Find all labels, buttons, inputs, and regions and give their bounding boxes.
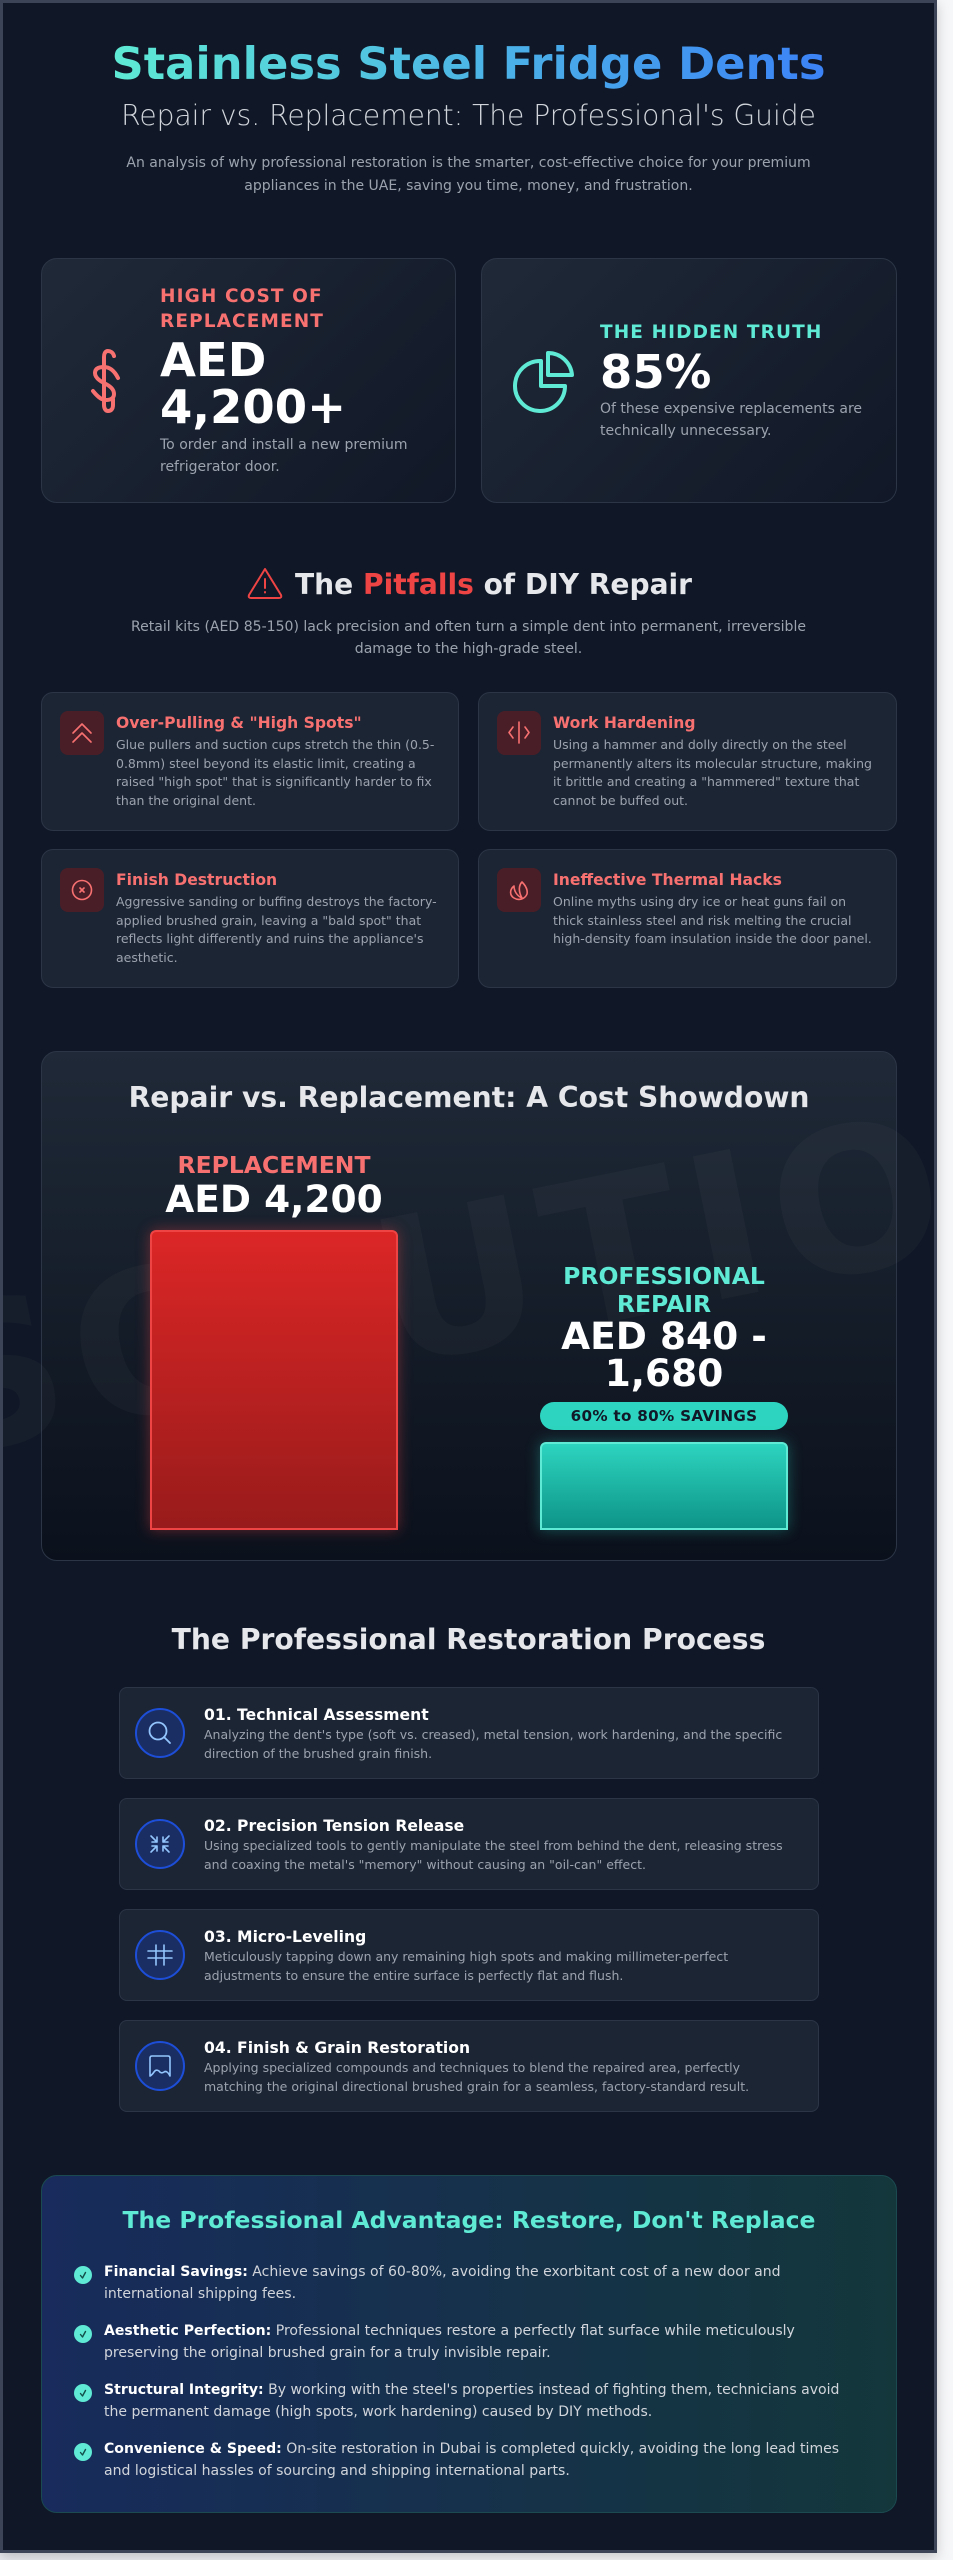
stat description — [600, 401, 862, 439]
step 1 — [119, 1687, 819, 1779]
stat value — [160, 333, 346, 434]
intro text: appliances in the UAE, saving you time, money, and frustration. — [244, 178, 693, 194]
savings pill — [540, 1402, 788, 1430]
repair label — [563, 1262, 765, 1318]
description: Glue pullers and suction cups stretch the thin (0.5- — [116, 737, 434, 752]
heading: Repair vs. Replacement: A Cost Showdown — [129, 1081, 809, 1114]
icon: pie chart — [513, 351, 574, 413]
bar: replacement — [150, 1230, 398, 1530]
text — [104, 2441, 839, 2479]
panel: high cost of replacement — [41, 258, 456, 503]
description: Using a hammer and dolly directly on the steel — [553, 737, 847, 752]
replacement label: REPLACEMENT — [178, 1151, 370, 1179]
item: financial savings — [74, 2264, 781, 2302]
title: 04. Finish & Grain Restoration — [204, 2039, 470, 2057]
icon: chevrons up — [60, 711, 104, 755]
description — [204, 1949, 728, 1983]
panel: thermal hacks — [478, 849, 897, 988]
title: 03. Micro-Leveling — [204, 1928, 366, 1946]
description: it brittle and creating a "hammered" texture that — [553, 774, 859, 789]
description: adjustments to ensure the entire surface is perfectly flat and flush. — [204, 1968, 623, 1983]
text: Convenience & Speed: On-site restoration in Dubai is completed quickly, avoiding the long lead times — [104, 2441, 839, 2457]
pitfalls intro: damage to the high-grade steel. — [355, 641, 582, 657]
stat description: Of these expensive replacements are — [600, 401, 862, 417]
subtitle: Repair vs. Replacement: The Professional's Guide — [121, 99, 816, 132]
description: raised "high spot" that is significantly harder to fix — [116, 774, 432, 789]
text: Financial Savings: Achieve savings of 60-80%, avoiding the exorbitant cost of a new door and — [104, 2264, 781, 2280]
title: 02. Precision Tension Release — [204, 1817, 464, 1835]
title: Stainless Steel Fridge Dents — [111, 36, 826, 90]
stat label: HIGH COST OF — [160, 286, 323, 307]
description: Using specialized tools to gently manipulate the steel from behind the dent, releasing stress — [204, 1838, 783, 1853]
title: Over-Pulling & "High Spots" — [116, 714, 362, 732]
stat label: REPLACEMENT — [160, 311, 324, 332]
savings pill: 60% to 80% SAVINGS — [571, 1407, 757, 1425]
repair value: 1,680 — [605, 1351, 723, 1395]
description — [116, 737, 434, 808]
description: thick stainless steel and risk melting the crucial — [553, 913, 852, 928]
panel: finish destruction — [41, 849, 459, 988]
description: and coaxing the metal's "memory" without causing an "oil-can" effect. — [204, 1857, 646, 1872]
description: 0.8mm) steel beyond its elastic limit, creating a — [116, 756, 416, 771]
panel: work hardening — [478, 692, 897, 831]
description: aesthetic. — [116, 950, 178, 965]
bar: repair — [540, 1442, 788, 1530]
check icon — [74, 2266, 92, 2284]
pitfalls intro: Retail kits (AED 85-150) lack precision and often turn a simple dent into permanent, irreversible — [131, 619, 806, 635]
description — [204, 2060, 749, 2094]
item: convenience and speed — [74, 2441, 839, 2479]
title: Ineffective Thermal Hacks — [553, 870, 782, 888]
check icon — [74, 2325, 92, 2343]
description — [116, 894, 437, 965]
text — [104, 2323, 795, 2361]
intro text: An analysis of why professional restoration is the smarter, cost-effective choice for your premium — [126, 155, 811, 171]
stat value: 4,200+ — [160, 380, 346, 434]
panel: cost showdown — [41, 1051, 897, 1561]
text — [104, 2264, 781, 2302]
stat value: AED — [160, 333, 266, 387]
icon: flame leaf — [497, 868, 541, 912]
description — [204, 1838, 783, 1872]
item: aesthetic perfection — [74, 2323, 795, 2361]
text: preserving the original brushed grain for a truly invisible repair. — [104, 2345, 551, 2361]
description — [553, 737, 872, 808]
heading: process: The Professional Restoration Process — [172, 1623, 765, 1656]
repair label: REPAIR — [617, 1290, 711, 1318]
panel: professional advantage — [41, 2175, 897, 2513]
stat description: technically unnecessary. — [600, 423, 771, 439]
icon: x circle — [60, 868, 104, 912]
description: Applying specialized compounds and techniques to blend the repaired area, perfectly — [204, 2060, 740, 2075]
text: Aesthetic Perfection: Professional techniques restore a perfectly flat surface while meticulously — [104, 2323, 795, 2339]
text: the permanent damage (high spots, work hardening) caused by DIY methods. — [104, 2404, 652, 2420]
icon: warning triangle — [248, 568, 282, 599]
icon: wavy card — [135, 2041, 185, 2091]
description: reflects light differently and ruins the appliance's — [116, 931, 423, 946]
title: 01. Technical Assessment — [204, 1706, 429, 1724]
replacement value: AED 4,200 — [165, 1177, 383, 1221]
description: high-density foam insulation inside the door panel. — [553, 931, 872, 946]
description: applied brushed grain, leaving a "bald spot" that — [116, 913, 421, 928]
description: cannot be buffed out. — [553, 793, 688, 808]
repair label: PROFESSIONAL — [563, 1262, 765, 1290]
check icon — [74, 2384, 92, 2402]
heading: pitfalls — [248, 568, 692, 601]
stat description: refrigerator door. — [160, 459, 280, 475]
text: Structural Integrity: By working with the steel's properties instead of fighting them, technicians avoid — [104, 2382, 839, 2398]
description: direction of the brushed grain finish. — [204, 1746, 432, 1761]
step 2 — [119, 1798, 819, 1890]
description — [553, 894, 872, 946]
panel: hidden truth — [481, 258, 897, 503]
icon: magnifier — [135, 1708, 185, 1758]
stat label — [160, 286, 324, 332]
description — [204, 1727, 782, 1761]
heading: The Professional Advantage: Restore, Don't Replace — [122, 2206, 816, 2234]
stat label: THE HIDDEN TRUTH — [600, 322, 822, 342]
text — [104, 2382, 839, 2420]
heading text: The Pitfalls of DIY Repair — [295, 568, 692, 601]
item: structural integrity — [74, 2382, 839, 2420]
text: and logistical hassles of sourcing and shipping international parts. — [104, 2463, 570, 2479]
icon: dollar — [90, 349, 120, 413]
description: Analyzing the dent's type (soft vs. creased), metal tension, work hardening, and the specific — [204, 1727, 782, 1742]
stat description — [160, 437, 408, 475]
description: Aggressive sanding or buffing destroys the factory- — [116, 894, 437, 909]
description: Meticulously tapping down any remaining high spots and making millimeter-perfect — [204, 1949, 728, 1964]
text: international shipping fees. — [104, 2286, 296, 2302]
repair value: AED 840 - — [561, 1314, 767, 1358]
step 4 — [119, 2020, 819, 2112]
panel: over-pulling — [41, 692, 459, 831]
icon: hash lines — [135, 1930, 185, 1980]
repair value — [561, 1314, 767, 1395]
pitfalls intro — [131, 619, 806, 657]
title: Work Hardening — [553, 714, 696, 732]
icon: code line — [497, 711, 541, 755]
description: matching the original directional brushed grain for a seamless, factory-standard result. — [204, 2079, 749, 2094]
description: permanently alters its molecular structure, making — [553, 756, 872, 771]
stat description: To order and install a new premium — [160, 437, 408, 453]
step 3 — [119, 1909, 819, 2001]
description: than the original dent. — [116, 793, 256, 808]
intro text — [126, 155, 811, 194]
description: Online myths using dry ice or heat guns fail on — [553, 894, 846, 909]
title: Finish Destruction — [116, 870, 277, 888]
check icon — [74, 2443, 92, 2461]
stat value: 85% — [600, 345, 711, 399]
icon: compress arrows — [135, 1819, 185, 1869]
